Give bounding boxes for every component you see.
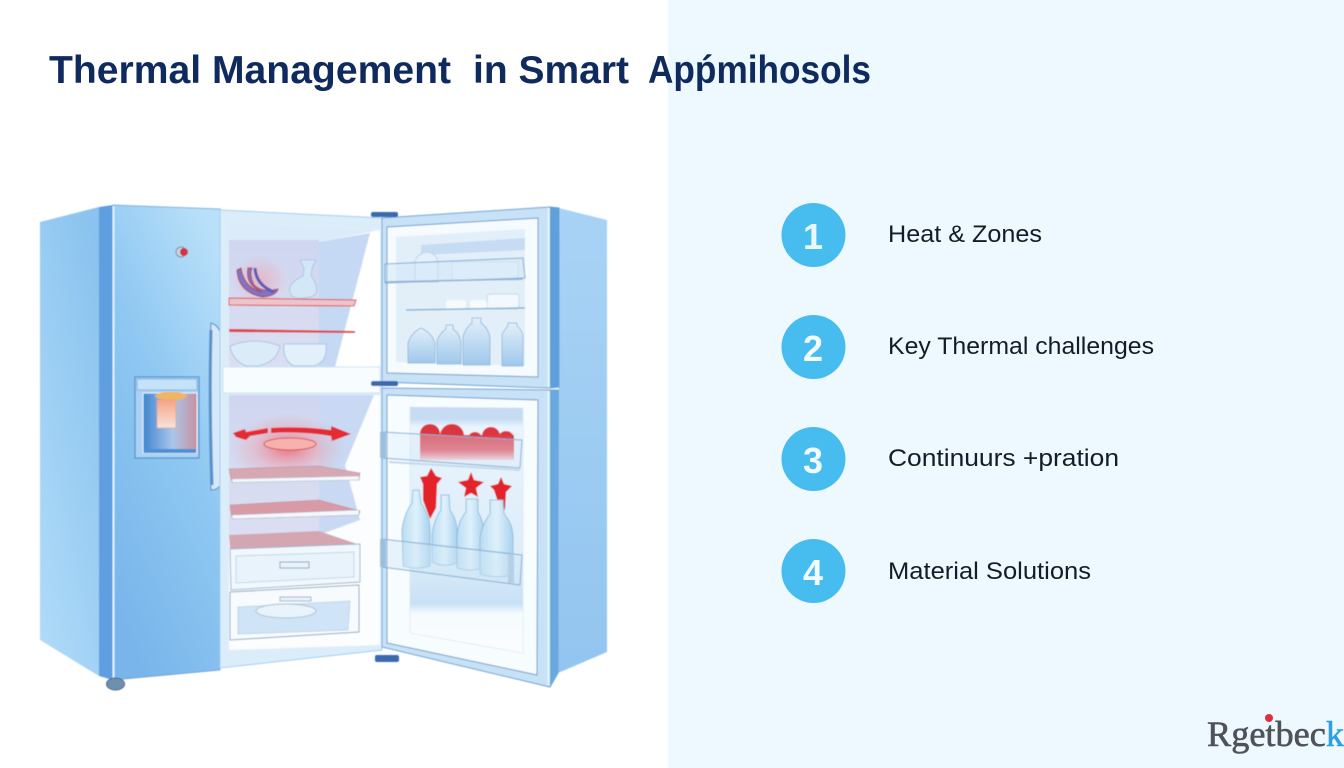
number badge 3 — [782, 427, 846, 491]
list item 4 — [782, 539, 1091, 603]
red shelves — [229, 298, 356, 306]
label 2: Key Thermal challenges — [888, 333, 1154, 360]
middle shelf with dishes — [406, 294, 525, 310]
number badge 2 — [782, 315, 846, 379]
list item 1 — [782, 203, 1042, 267]
number badge 3: 3 — [803, 440, 823, 481]
bananas — [237, 268, 278, 297]
red star markers — [420, 468, 512, 519]
panel: white background — [0, 0, 668, 768]
shelves — [229, 466, 360, 549]
door handle — [210, 323, 223, 490]
upper compartment — [229, 222, 380, 367]
upper right door — [382, 207, 559, 388]
heat dish — [264, 438, 316, 450]
number badge 1: 1 — [803, 216, 823, 257]
bowls — [230, 341, 326, 366]
title: Apṕmihosols — [648, 49, 871, 92]
door shelf with containers — [385, 252, 525, 283]
illustration: open refrigerator — [40, 205, 607, 690]
lower door shelf — [382, 539, 522, 585]
number badge 4: 4 — [803, 552, 823, 593]
label 3: Continuurs +pration — [888, 445, 1119, 472]
door hinges — [371, 212, 399, 662]
foot — [106, 678, 124, 690]
bottom bottles — [408, 318, 523, 366]
centre divider — [223, 367, 380, 393]
title: in Smart — [473, 49, 629, 92]
tomatoes in door shelf — [380, 424, 522, 470]
list item 3 — [782, 427, 1119, 491]
lower compartment — [229, 395, 380, 650]
lower right door — [380, 388, 559, 687]
cabinet — [220, 210, 382, 668]
bottles with red stars — [380, 468, 522, 585]
left door — [99, 205, 223, 680]
title: Thermal Management — [49, 49, 451, 92]
jug — [290, 260, 316, 298]
label 4: Material Solutions — [888, 558, 1091, 585]
title — [49, 49, 871, 92]
number badge 2: 2 — [803, 328, 823, 369]
right side panel — [558, 208, 607, 673]
logo: Rgetbeck — [1207, 714, 1344, 754]
door indicator knob — [176, 247, 188, 257]
number badge 1 — [782, 203, 846, 267]
list item 2 — [782, 315, 1154, 379]
red heat arrows — [233, 426, 351, 441]
left side panel — [40, 207, 99, 676]
drawer 2 — [230, 585, 359, 640]
number badge 4 — [782, 539, 846, 603]
water dispenser — [135, 377, 199, 458]
label 1: Heat & Zones — [888, 221, 1042, 248]
drawer 1 — [230, 544, 360, 590]
panel: right pale blue background — [668, 0, 1344, 768]
